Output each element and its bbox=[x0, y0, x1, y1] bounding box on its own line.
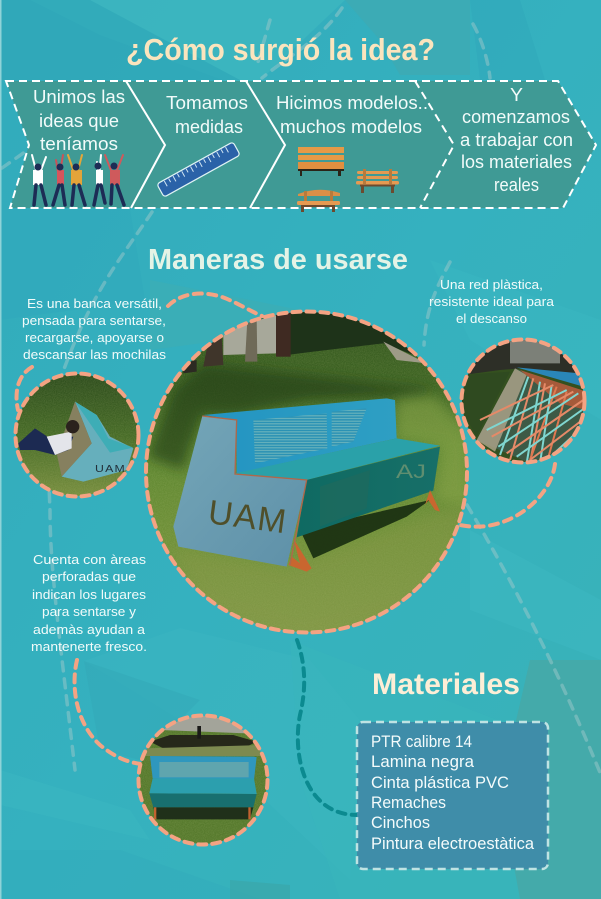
text: red plástica: Una red plàstica, bbox=[440, 277, 543, 292]
side panel bbox=[173, 416, 307, 567]
list items: PTR calibre 14 bbox=[371, 733, 472, 751]
step 3 text bbox=[276, 93, 428, 137]
bench top bbox=[517, 367, 583, 387]
list box bbox=[357, 722, 548, 869]
text: red plástica: el descanso bbox=[456, 311, 527, 326]
net bbox=[57, 402, 92, 477]
back panel bbox=[203, 398, 397, 473]
front panel bbox=[297, 447, 440, 537]
text: banca versátil bbox=[22, 296, 167, 362]
step 1 text: Unimos las bbox=[33, 87, 125, 107]
seat bbox=[149, 778, 257, 794]
net strands bbox=[480, 377, 587, 463]
text: banca versátil: recargarse, apoyarse o bbox=[25, 330, 164, 345]
text: banca versátil: descansar las mochilas bbox=[23, 347, 167, 362]
bottom photo border bbox=[138, 716, 268, 844]
shadow under bench bbox=[153, 807, 253, 819]
bench side bbox=[62, 402, 133, 482]
sunny lawn on the right bbox=[397, 395, 470, 507]
icon: large bench bbox=[298, 147, 344, 176]
step 4 text: a trabajar con bbox=[460, 130, 573, 150]
salmon connectors bbox=[17, 294, 555, 764]
chevron outlines bbox=[6, 81, 596, 208]
icon: small bench bbox=[356, 169, 399, 193]
shaded grass bbox=[462, 374, 468, 402]
step 2 text: Tomamos bbox=[166, 93, 248, 113]
text: áreas perforadas: ademàs ayudan a bbox=[33, 622, 146, 637]
background trees bbox=[289, 312, 417, 356]
list items: Remaches bbox=[371, 794, 446, 812]
icon: curved bench bbox=[297, 190, 340, 212]
photo: person resting bbox=[16, 374, 138, 496]
step 1 text: ideas que bbox=[39, 111, 119, 131]
left photo border bbox=[16, 374, 138, 496]
heading: Materiales: Materiales bbox=[372, 668, 520, 701]
step 4 text: comenzamos bbox=[462, 107, 570, 127]
step 1 text: teníamos bbox=[40, 134, 118, 154]
step 4 text: los materiales bbox=[461, 152, 572, 172]
dense strands band bbox=[477, 368, 527, 452]
text: áreas perforadas: para sentarse y bbox=[42, 604, 137, 619]
net backing bbox=[477, 368, 587, 463]
step 2 text: medidas bbox=[175, 117, 243, 137]
panel: materials list bbox=[357, 722, 548, 869]
main photo border bbox=[146, 312, 467, 632]
list items: Lamina negra bbox=[371, 753, 475, 771]
step 3 text: muchos modelos bbox=[280, 117, 422, 137]
tree bed bbox=[150, 735, 257, 748]
background buildings bbox=[223, 315, 277, 355]
lawn shadow bbox=[147, 363, 433, 470]
bench letters: UAM bbox=[95, 464, 126, 475]
list items: Cinta plástica PVC bbox=[371, 774, 509, 792]
photo: plastic net bbox=[462, 340, 584, 462]
perforated back areas bbox=[253, 413, 327, 463]
person bbox=[18, 428, 73, 455]
list items bbox=[371, 733, 535, 853]
text: áreas perforadas: indican los lugares bbox=[32, 587, 147, 602]
step 4 text: Y bbox=[510, 85, 523, 105]
text: áreas perforadas: perforadas que bbox=[42, 569, 136, 584]
text: banca versátil: Es una banca versátil, bbox=[27, 296, 162, 311]
chevron fill bbox=[6, 81, 596, 208]
pavement bbox=[164, 716, 244, 734]
right photo border bbox=[462, 340, 584, 462]
step 3 text: Hicimos modelos.. bbox=[276, 93, 428, 113]
lawn foreground bbox=[344, 514, 458, 602]
front panel bbox=[149, 793, 257, 807]
photo: bench on grass: AJ bbox=[396, 462, 426, 483]
title: ¿Cómo surgió la idea? bbox=[126, 32, 435, 67]
step 4 text bbox=[460, 85, 573, 195]
seat bbox=[235, 438, 440, 480]
text: banca versátil: pensada para sentarse, bbox=[22, 313, 166, 328]
text: áreas perforadas bbox=[31, 552, 147, 654]
list items: Cinchos bbox=[371, 814, 430, 832]
process chevron band bbox=[6, 81, 596, 212]
step 1 text bbox=[33, 87, 125, 154]
step 4 text: reales bbox=[494, 175, 539, 195]
icon: ruler bbox=[157, 142, 240, 197]
step 2 text bbox=[166, 93, 248, 137]
list items: Pintura electroestàtica bbox=[371, 835, 535, 853]
photo: bench on grass bbox=[140, 305, 475, 640]
text: red plástica bbox=[429, 277, 555, 326]
tree trunks bbox=[276, 308, 291, 357]
photo: bench front bbox=[139, 716, 267, 844]
text: áreas perforadas: mantenerte fresco. bbox=[31, 639, 147, 654]
legs bbox=[288, 538, 312, 572]
heading: Maneras de usarse: Maneras de usarse bbox=[148, 244, 408, 276]
bench cut-out letters: UAM bbox=[206, 493, 288, 541]
text: áreas perforadas: Cuenta con àreas bbox=[33, 552, 147, 567]
back panel bbox=[150, 756, 257, 780]
sky and trees bbox=[468, 341, 580, 378]
icon: group of people bbox=[32, 155, 124, 205]
teal connector bbox=[297, 640, 357, 815]
under-bench shadow bbox=[300, 500, 430, 558]
text: red plástica: resistente ideal para bbox=[429, 294, 555, 309]
